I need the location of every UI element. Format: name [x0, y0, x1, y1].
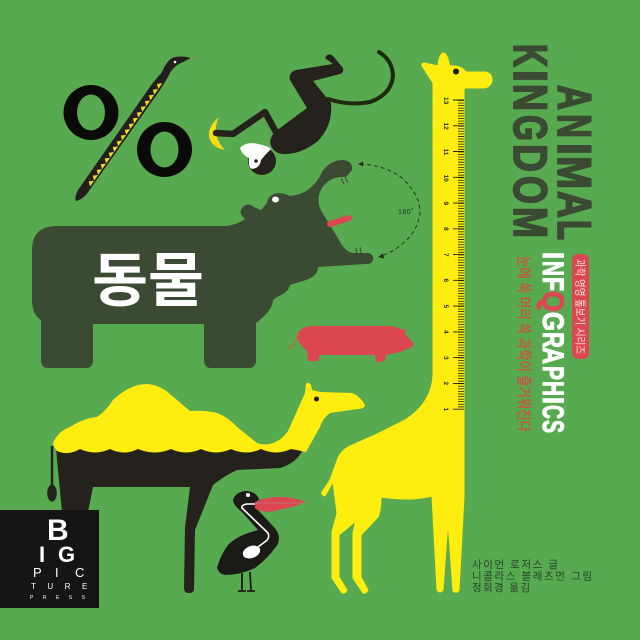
pelican legs	[238, 572, 255, 591]
icon: monkey with banana	[209, 52, 393, 175]
publisher logo: Big Picture Press	[0, 510, 99, 608]
subtitle: INFOGRAPHICS: G	[536, 312, 569, 331]
credits	[472, 559, 592, 594]
subtitle: INFOGRAPHICS: P	[536, 366, 569, 380]
credits: 정회경 옮김	[472, 581, 530, 594]
pig tail	[288, 333, 298, 348]
ruler numbers: 8	[442, 227, 449, 231]
subtitle: INFOGRAPHICS: H	[536, 381, 569, 396]
pelican wing spot	[241, 543, 262, 561]
publisher logo: Big Picture Press: P	[33, 565, 42, 580]
series badge: 과학 영영 톺보기 시리즈	[574, 259, 586, 354]
subtitle: INFOGRAPHICS: I	[536, 397, 569, 404]
title: ANIMAL KINGDOM: L	[548, 220, 601, 240]
snake	[75, 56, 191, 201]
series badge	[572, 254, 589, 359]
ruler numbers	[442, 97, 449, 412]
icon: pelican	[217, 491, 305, 591]
banana	[209, 117, 225, 150]
title: ANIMAL KINGDOM: N	[504, 84, 557, 111]
ruler minor ticks	[458, 100, 464, 409]
title: ANIMAL KINGDOM	[504, 44, 601, 240]
icon: giraffe with ruler neck	[322, 53, 492, 593]
title: ANIMAL KINGDOM: A	[548, 191, 601, 218]
monkey arm	[216, 112, 277, 134]
subtitle: INFOGRAPHICS: I	[536, 252, 569, 259]
subtitle: INFOGRAPHICS: Q	[536, 291, 569, 312]
180 degree arc	[360, 164, 420, 256]
subtitle: INFOGRAPHICS	[536, 252, 569, 433]
icon: camel	[47, 383, 365, 593]
ruler numbers: 10	[442, 174, 449, 182]
camel tail	[51, 446, 53, 487]
pelican eye	[246, 493, 250, 497]
title: ANIMAL KINGDOM: O	[504, 176, 557, 204]
title: ANIMAL KINGDOM: N	[548, 114, 601, 138]
ruler on giraffe neck	[442, 97, 464, 412]
title: ANIMAL KINGDOM: I	[548, 143, 601, 155]
tagline: 눈에 쏙 머리 쏙 과학이 즐거워진다	[515, 256, 532, 432]
ruler numbers: 2	[442, 382, 449, 386]
pelican beak	[255, 497, 305, 512]
publisher logo: Big Picture Press: PRESS	[30, 595, 94, 601]
title: ANIMAL KINGDOM: A	[548, 85, 601, 110]
ruler long ticks	[453, 100, 464, 409]
subtitle: INFOGRAPHICS: A	[536, 347, 569, 364]
icon: percent sign with snake	[63, 56, 199, 201]
ruler numbers: 3	[442, 356, 449, 360]
camel black lower body	[56, 448, 303, 593]
pelican body	[217, 491, 279, 575]
camel eye	[314, 396, 319, 402]
publisher logo: Big Picture Press: G	[58, 542, 75, 567]
ruler numbers: 9	[442, 202, 449, 206]
hippo teeth	[341, 177, 361, 254]
hippo eye	[272, 196, 279, 202]
ruler numbers: 12	[442, 122, 449, 130]
title: ANIMAL KINGDOM: K	[504, 44, 557, 67]
title: ANIMAL KINGDOM: M	[504, 207, 557, 238]
monkey head	[248, 147, 276, 175]
logo letters: B	[47, 514, 69, 547]
percent circles	[63, 85, 119, 140]
monkey body	[270, 54, 343, 154]
title: ANIMAL KINGDOM: I	[504, 70, 557, 82]
subtitle: INFOGRAPHICS: N	[536, 261, 569, 276]
ruler numbers: 4	[442, 330, 449, 334]
ruler numbers: 1	[442, 408, 449, 412]
title: ANIMAL KINGDOM: G	[504, 115, 557, 141]
ruler numbers: 7	[442, 253, 449, 257]
credits: 사이먼 로저스 글	[472, 559, 558, 571]
giraffe eye	[453, 68, 459, 74]
monkey tail	[328, 52, 393, 103]
publisher logo: Big Picture Press: TURE	[31, 582, 99, 591]
credits: 니콜라스 블레츠먼 그림	[472, 570, 592, 582]
icon: pig	[288, 326, 414, 362]
ruler numbers: 13	[442, 97, 449, 105]
heading: 동물: 동물	[92, 233, 204, 318]
ruler numbers: 11	[442, 148, 449, 156]
ruler numbers: 6	[442, 278, 449, 282]
icon: hippo with open mouth	[32, 160, 420, 368]
ruler numbers: 5	[442, 304, 449, 308]
publisher logo: Big Picture Press: C	[75, 565, 84, 580]
snake pattern	[87, 81, 162, 187]
title: ANIMAL KINGDOM: D	[504, 144, 557, 172]
subtitle: INFOGRAPHICS: S	[536, 420, 569, 433]
subtitle: INFOGRAPHICS: C	[536, 405, 569, 419]
title: ANIMAL KINGDOM: M	[548, 156, 601, 189]
subtitle: INFOGRAPHICS: F	[536, 277, 569, 291]
monkey face	[240, 143, 271, 169]
camel yellow hump and neck	[53, 383, 365, 453]
hippo tongue	[330, 218, 349, 224]
publisher logo: Big Picture Press: I	[39, 542, 45, 567]
subtitle: INFOGRAPHICS: R	[536, 332, 569, 348]
pelican white neck line	[242, 504, 269, 547]
label: 180 degrees: 180˚	[398, 208, 414, 216]
publisher logo: Big Picture Press: I	[55, 565, 59, 580]
